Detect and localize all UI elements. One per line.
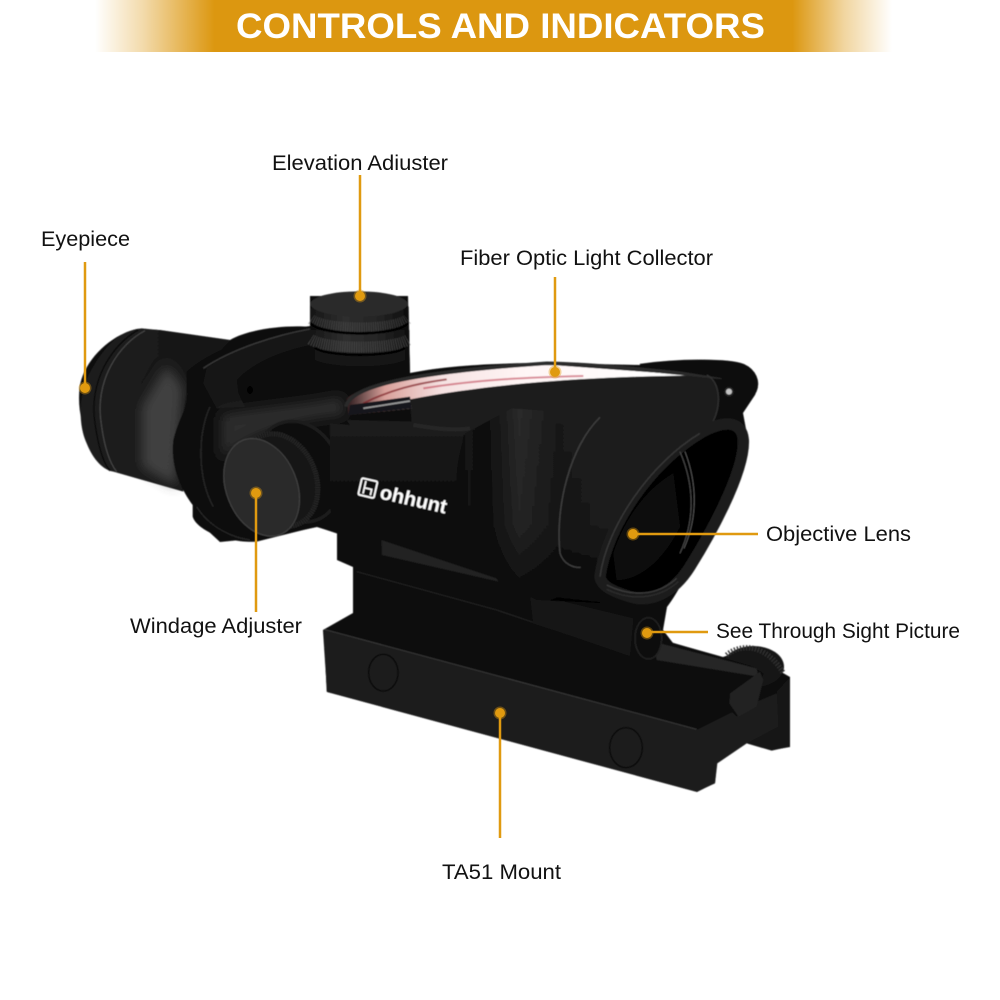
callout: elevation adjuster: Elevation Adiuster [272,152,448,175]
main housing [173,326,430,560]
product photo: riflescope [79,291,790,792]
objective housing [330,375,718,603]
callout: see through sight picture: See Through Sight Picture [716,620,960,643]
objective barrel [457,408,710,603]
mount upper plate [353,567,763,717]
mount rear knob [723,646,784,687]
objective lens opening [600,424,743,599]
callout: windage adjuster: Windage Adjuster [130,615,302,638]
callout: fiber optic light collector: Fiber Optic Light Collector [460,247,713,270]
callout: eyepiece [41,228,130,393]
callout: objective lens [628,523,911,546]
windage knob [210,408,356,548]
see-through sight hole [635,618,662,659]
brand name: ohhunt [378,482,449,519]
callout: objective lens: Objective Lens [766,523,911,546]
callout: fiber optic light collector [460,247,713,377]
callout: TA51 mount: TA51 Mount [442,861,561,884]
callout: windage adjuster [130,488,302,638]
brand logo [357,477,449,519]
header band [95,0,892,52]
title: CONTROLS AND INDICATORS [236,6,765,46]
callout: eyepiece: Eyepiece [41,228,130,251]
fiber optic collector [346,361,757,421]
eyepiece tube [81,328,230,492]
scope silhouette [79,296,790,792]
mount base rail [324,629,790,792]
callout: elevation adjuster [272,152,448,301]
elevation knob [310,291,410,377]
callout: TA51 mount [442,708,561,884]
